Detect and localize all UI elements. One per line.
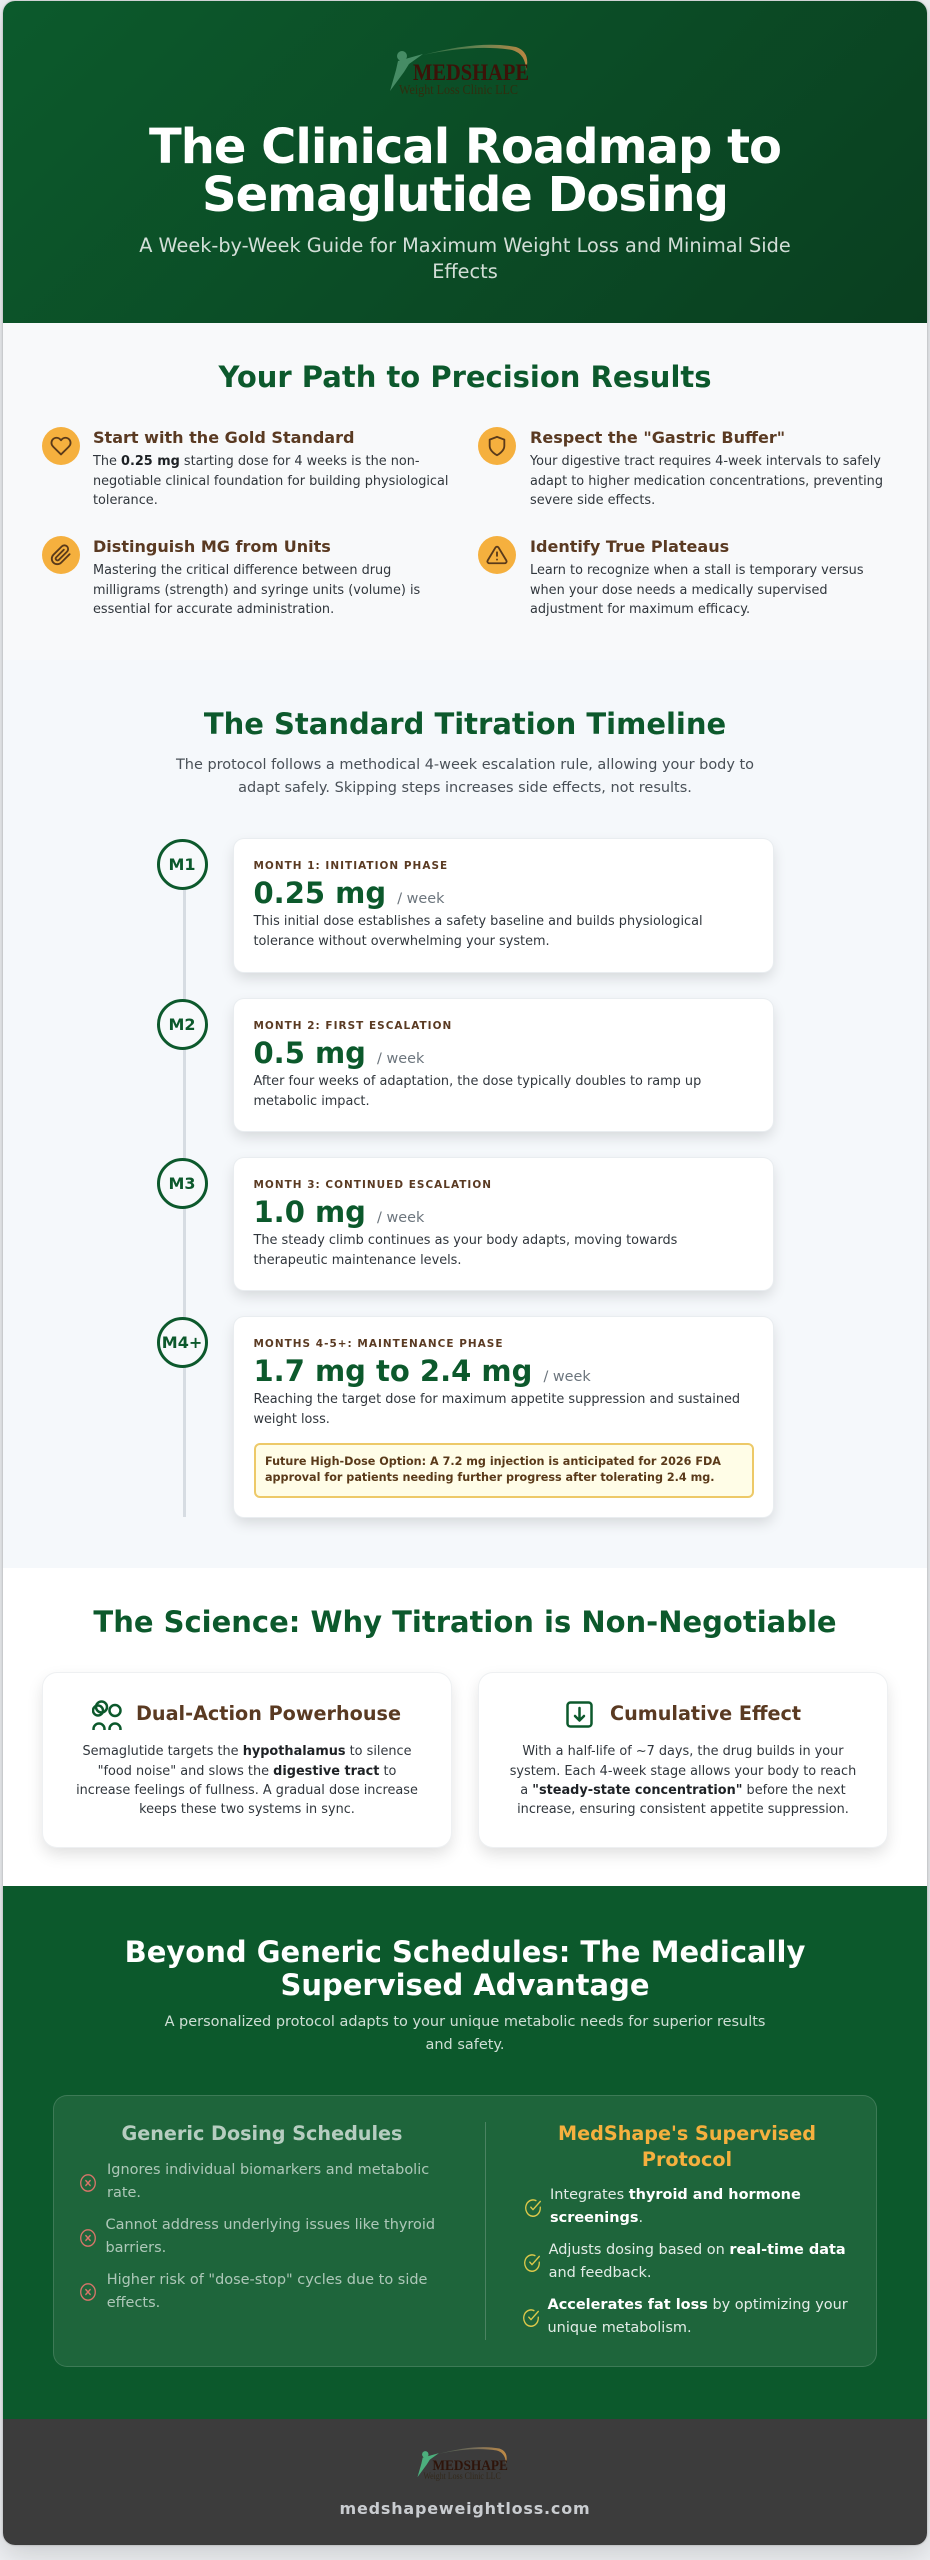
card: month 2: 0.5 mg / week: [254, 1036, 424, 1070]
generic item 2: [106, 2216, 435, 2256]
medshape item 2: Adjusts dosing based on real-time data: [549, 2242, 846, 2258]
medshape item 1: [550, 2186, 801, 2226]
comparison panel: [53, 2095, 877, 2367]
generic item 2: Cannot address underlying issues like thyroid: [106, 2216, 435, 2232]
card: month 1: 0.25 mg / week: [254, 876, 444, 910]
point: mg from units: Mastering the critical difference between drug: [93, 563, 391, 578]
card text: Semaglutide targets the hypothalamus to silence: [82, 1744, 412, 1759]
logo: MedShape: Weight Loss Clinic LLC: [399, 83, 518, 98]
point: gold standard: The 0.25 mg starting dose for 4 weeks is the non-: [93, 454, 420, 469]
panel: medically supervised advantage: [3, 1886, 927, 2419]
heading: [125, 1934, 805, 2002]
generic item 2: barriers.: [106, 2240, 166, 2256]
point: gastric buffer: adapt to higher medication concentrations, preventing: [530, 474, 883, 489]
card: month 2: metabolic impact.: [254, 1094, 370, 1109]
point: true plateaus: Identify True Plateaus: [530, 537, 729, 556]
marker: M3: [156, 1158, 208, 1209]
card: months 4-5+: weight loss.: [254, 1412, 330, 1427]
medshape item 3: unique metabolism.: [548, 2320, 692, 2336]
card text: keeps these two systems in sync.: [139, 1802, 355, 1817]
intro text: and safety.: [426, 2037, 504, 2053]
logo: MedShape small: MEDSHAPE: [432, 2458, 508, 2474]
point: gold standard: [92, 428, 448, 508]
heading: Your Path to Precision Results: [218, 360, 712, 394]
medshape item 1: Integrates thyroid and hormone: [550, 2186, 801, 2202]
card: month 2: After four weeks of adaptation, the dose typically doubles to ramp up: [254, 1074, 701, 1089]
point: gastric buffer: Your digestive tract requires 4-week intervals to safely: [530, 454, 881, 469]
marker: M4+: M4+: [162, 1333, 202, 1352]
point: true plateaus: [530, 537, 864, 617]
medshape item 1: screenings.: [550, 2210, 643, 2226]
heading: The Science: Why Titration is Non-Negotiable: [93, 1605, 837, 1639]
card text: With a half-life of ~7 days, the drug builds in your: [522, 1744, 844, 1759]
card text: "food noise" and slows the digestive tract to: [98, 1764, 396, 1779]
card: month 3: MONTH 3: CONTINUED ESCALATION: [254, 1179, 492, 1191]
panel: footer: [3, 2419, 927, 2545]
panel: path to precision results: [3, 323, 927, 660]
point: gastric buffer: [530, 428, 883, 508]
medshape item 3: Accelerates fat loss by optimizing your: [548, 2297, 848, 2313]
point: gold standard: negotiable clinical foundation for building physiological: [93, 474, 448, 489]
icon: x 2: [80, 2229, 96, 2247]
title: Semaglutide Dosing: [202, 167, 728, 223]
marker: M1: M1: [168, 855, 196, 874]
subtitle: [139, 234, 791, 282]
logo: MedShape small: [418, 2447, 508, 2481]
card: month 3: The steady climb continues as your body adapts, moving towards: [254, 1233, 677, 1248]
heading: The Standard Titration Timeline: [204, 707, 726, 741]
medshape column title: Protocol: [642, 2148, 732, 2171]
logo: MedShape small: Weight Loss Clinic LLC: [423, 2471, 501, 2481]
icon: x 3: [80, 2283, 96, 2301]
medshape item 2: and feedback.: [549, 2265, 651, 2281]
icon: shield: [478, 427, 516, 465]
card title: Dual-Action Powerhouse: [136, 1702, 401, 1725]
card text: system. Each 4-week stage allows your body to reach: [510, 1764, 856, 1779]
point: gastric buffer: Respect the "Gastric Buffer": [530, 428, 785, 447]
subtitle: Effects: [432, 260, 498, 282]
marker: M3: M3: [168, 1174, 196, 1193]
icon: check 3: [523, 2309, 539, 2327]
card: month 1: This initial dose establishes a safety baseline and builds physiological: [254, 914, 703, 929]
medshape column title: MedShape's Supervised: [558, 2122, 816, 2145]
intro text: A personalized protocol adapts to your unique metabolic needs for superior results: [165, 2014, 765, 2030]
medshape column title: [558, 2122, 816, 2171]
card: month 1: tolerance without overwhelming your system.: [254, 934, 550, 949]
callout: future high dose: Future High-Dose Option: A 7.2 mg injection is anticipated for 2026 FDA: [265, 1455, 721, 1468]
medshape item 3: [548, 2297, 848, 2336]
card: months 4-5+: [234, 1317, 773, 1517]
generic item 3: Higher risk of "dose-stop" cycles due to side: [107, 2272, 427, 2288]
card: month 3: [234, 1158, 773, 1290]
card text: increase, ensuring consistent appetite suppression.: [517, 1802, 849, 1817]
logo: MedShape: [390, 44, 529, 98]
card: dual-action powerhouse: [43, 1673, 451, 1847]
generic item 1: Ignores individual biomarkers and metabolic: [107, 2162, 429, 2178]
generic item 1: [107, 2162, 429, 2200]
point: true plateaus: when your dose needs a medically supervised: [530, 583, 828, 598]
intro text: [164, 2014, 765, 2053]
card text: a "steady-state concentration" before the next: [520, 1783, 846, 1798]
title: [149, 119, 781, 223]
icon: paperclip: [42, 536, 80, 574]
heading: Supervised Advantage: [280, 1968, 650, 2002]
generic item 3: [107, 2272, 427, 2310]
callout: future high dose: approval for patients needing further progress after tolerating 2.4 mg.: [265, 1471, 715, 1484]
icon: rings: [92, 1700, 122, 1730]
point: true plateaus: adjustment for maximum efficacy.: [530, 602, 750, 617]
card: month 1: MONTH 1: INITIATION PHASE: [254, 860, 448, 872]
marker: M4+: [156, 1317, 208, 1368]
marker: M2: [156, 998, 208, 1050]
icon: down arrow box: [566, 1701, 593, 1728]
card text: increase feelings of fullness. A gradual dose increase: [76, 1783, 418, 1798]
title: The Clinical Roadmap to: [149, 119, 781, 175]
card: cumulative effect: [479, 1673, 887, 1847]
callout: future high dose: [254, 1442, 754, 1498]
medshape item 2: [548, 2242, 846, 2281]
timeline line: [182, 889, 186, 1517]
intro text: [176, 756, 754, 796]
card: months 4-5+: MONTHS 4-5+: MAINTENANCE PHASE: [254, 1338, 504, 1350]
icon: heart: [42, 427, 80, 465]
intro text: The protocol follows a methodical 4-week escalation rule, allowing your body to: [176, 756, 754, 772]
card text: [76, 1744, 418, 1817]
point: mg from units: essential for accurate administration.: [93, 602, 334, 617]
card text: [510, 1744, 856, 1817]
card: month 2: [234, 999, 773, 1131]
marker: M2: M2: [168, 1014, 196, 1034]
panel: titration timeline: [3, 660, 927, 1568]
point: mg from units: Distinguish MG from Units: [93, 537, 331, 556]
card title: Cumulative Effect: [610, 1702, 801, 1725]
panel: the science: [3, 1568, 927, 1886]
point: mg from units: [93, 537, 420, 617]
generic column title: Generic Dosing Schedules: [122, 2122, 402, 2145]
icon: x 1: [80, 2174, 96, 2192]
card: months 4-5+: 1.7 mg to 2.4 mg / week: [254, 1354, 591, 1388]
card: month 1: [234, 839, 773, 972]
point: mg from units: milligrams (strength) and syringe units (volume) is: [93, 583, 420, 598]
icon: check 2: [524, 2254, 540, 2272]
marker: M1: [156, 839, 208, 890]
point: gold standard: tolerance.: [93, 493, 158, 508]
icon: check 1: [525, 2199, 541, 2217]
website url: medshapeweightloss.com: [340, 2499, 590, 2518]
generic item 3: effects.: [107, 2294, 160, 2310]
subtitle: A Week-by-Week Guide for Maximum Weight Loss and Minimal Side: [139, 234, 791, 256]
point: gastric buffer: severe side effects.: [530, 493, 655, 508]
card: months 4-5+: Reaching the target dose for maximum appetite suppression and sustained: [254, 1392, 740, 1407]
divider: [484, 2122, 486, 2340]
card: month 3: 1.0 mg / week: [254, 1195, 424, 1229]
card: month 2: MONTH 2: FIRST ESCALATION: [254, 1020, 452, 1032]
panel: header: [3, 1, 927, 323]
icon: warning triangle: [478, 536, 516, 574]
intro text: adapt safely. Skipping steps increases side effects, not results.: [238, 780, 692, 796]
heading: Beyond Generic Schedules: The Medically: [125, 1934, 805, 1968]
point: true plateaus: Learn to recognize when a stall is temporary versus: [530, 563, 864, 578]
logo: MedShape: MEDSHAPE: [413, 60, 529, 85]
generic item 1: rate.: [107, 2184, 141, 2200]
card: month 3: therapeutic maintenance levels.: [254, 1253, 461, 1268]
point: gold standard: Start with the Gold Standard: [93, 428, 355, 447]
